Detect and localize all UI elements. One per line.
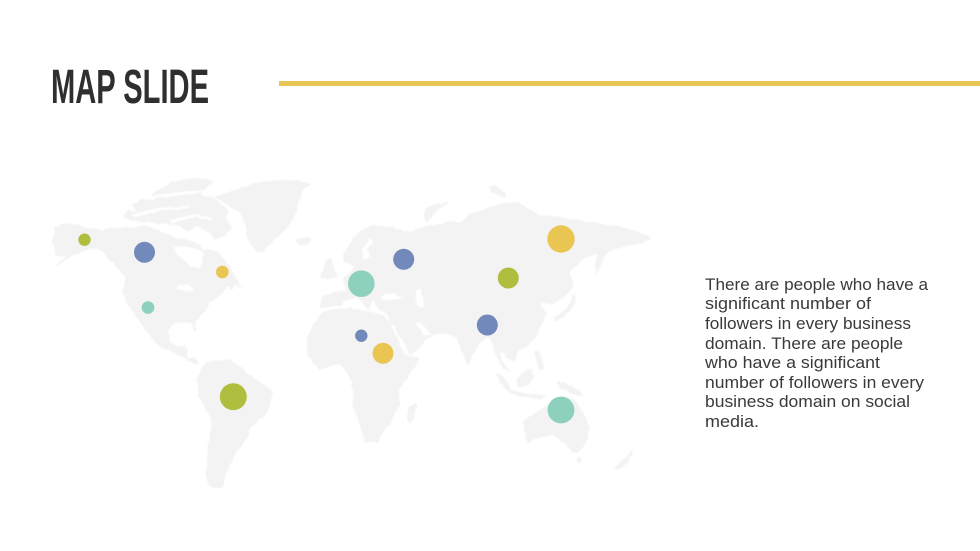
body text: domain. There are people bbox=[705, 335, 903, 353]
body text: business domain on social bbox=[705, 393, 910, 411]
great britain bbox=[319, 259, 338, 279]
tasmania bbox=[577, 458, 582, 463]
baltic sea bbox=[362, 238, 374, 260]
marker: siberia bbox=[547, 225, 575, 253]
north america bbox=[51, 223, 243, 365]
title: MAP SLIDE bbox=[51, 61, 209, 114]
marker: east africa bbox=[372, 343, 394, 364]
body text: number of followers in every bbox=[705, 374, 925, 392]
marker: central asia bbox=[498, 268, 519, 288]
eurasia bbox=[320, 203, 652, 372]
greenland bbox=[215, 180, 311, 253]
body text: followers in every business bbox=[705, 315, 911, 333]
philippines bbox=[535, 350, 544, 370]
body text: media. bbox=[705, 413, 759, 431]
arctic channels bbox=[132, 190, 212, 223]
new zealand bbox=[613, 450, 633, 470]
caspian sea bbox=[415, 288, 424, 308]
inland seas bbox=[132, 190, 433, 355]
sumatra and indonesia bbox=[495, 372, 548, 399]
body text: who have a significant bbox=[704, 354, 880, 372]
iceland bbox=[295, 237, 311, 246]
body text: significant number of bbox=[705, 295, 871, 313]
marker: western europe bbox=[348, 270, 375, 297]
japan bbox=[553, 294, 576, 321]
marker: north africa bbox=[355, 330, 367, 342]
data markers bbox=[78, 225, 575, 423]
arctic islands bbox=[122, 178, 232, 240]
black sea bbox=[380, 293, 403, 300]
body text: There are people who have a bbox=[705, 276, 929, 294]
marker: south asia bbox=[477, 314, 498, 336]
madagascar bbox=[407, 402, 418, 425]
new guinea bbox=[556, 381, 584, 396]
great lakes bbox=[178, 284, 194, 292]
marker: united states bbox=[142, 301, 154, 314]
marker: australia bbox=[548, 397, 574, 423]
australia bbox=[523, 397, 590, 452]
marker: alaska bbox=[78, 234, 91, 246]
title rule bbox=[279, 81, 980, 86]
marker: canada bbox=[134, 242, 155, 263]
body text bbox=[704, 276, 929, 431]
svalbard bbox=[489, 185, 507, 197]
marker: eastern europe bbox=[393, 249, 414, 270]
borneo bbox=[516, 368, 534, 386]
world map bbox=[51, 178, 652, 488]
red sea bbox=[391, 325, 408, 355]
marker: brazil bbox=[220, 383, 247, 410]
novaya zemlya bbox=[423, 202, 450, 223]
hudson bay bbox=[174, 246, 203, 268]
south america bbox=[197, 360, 273, 488]
marker: quebec bbox=[216, 266, 229, 278]
africa bbox=[307, 308, 420, 442]
persian gulf bbox=[415, 323, 433, 335]
